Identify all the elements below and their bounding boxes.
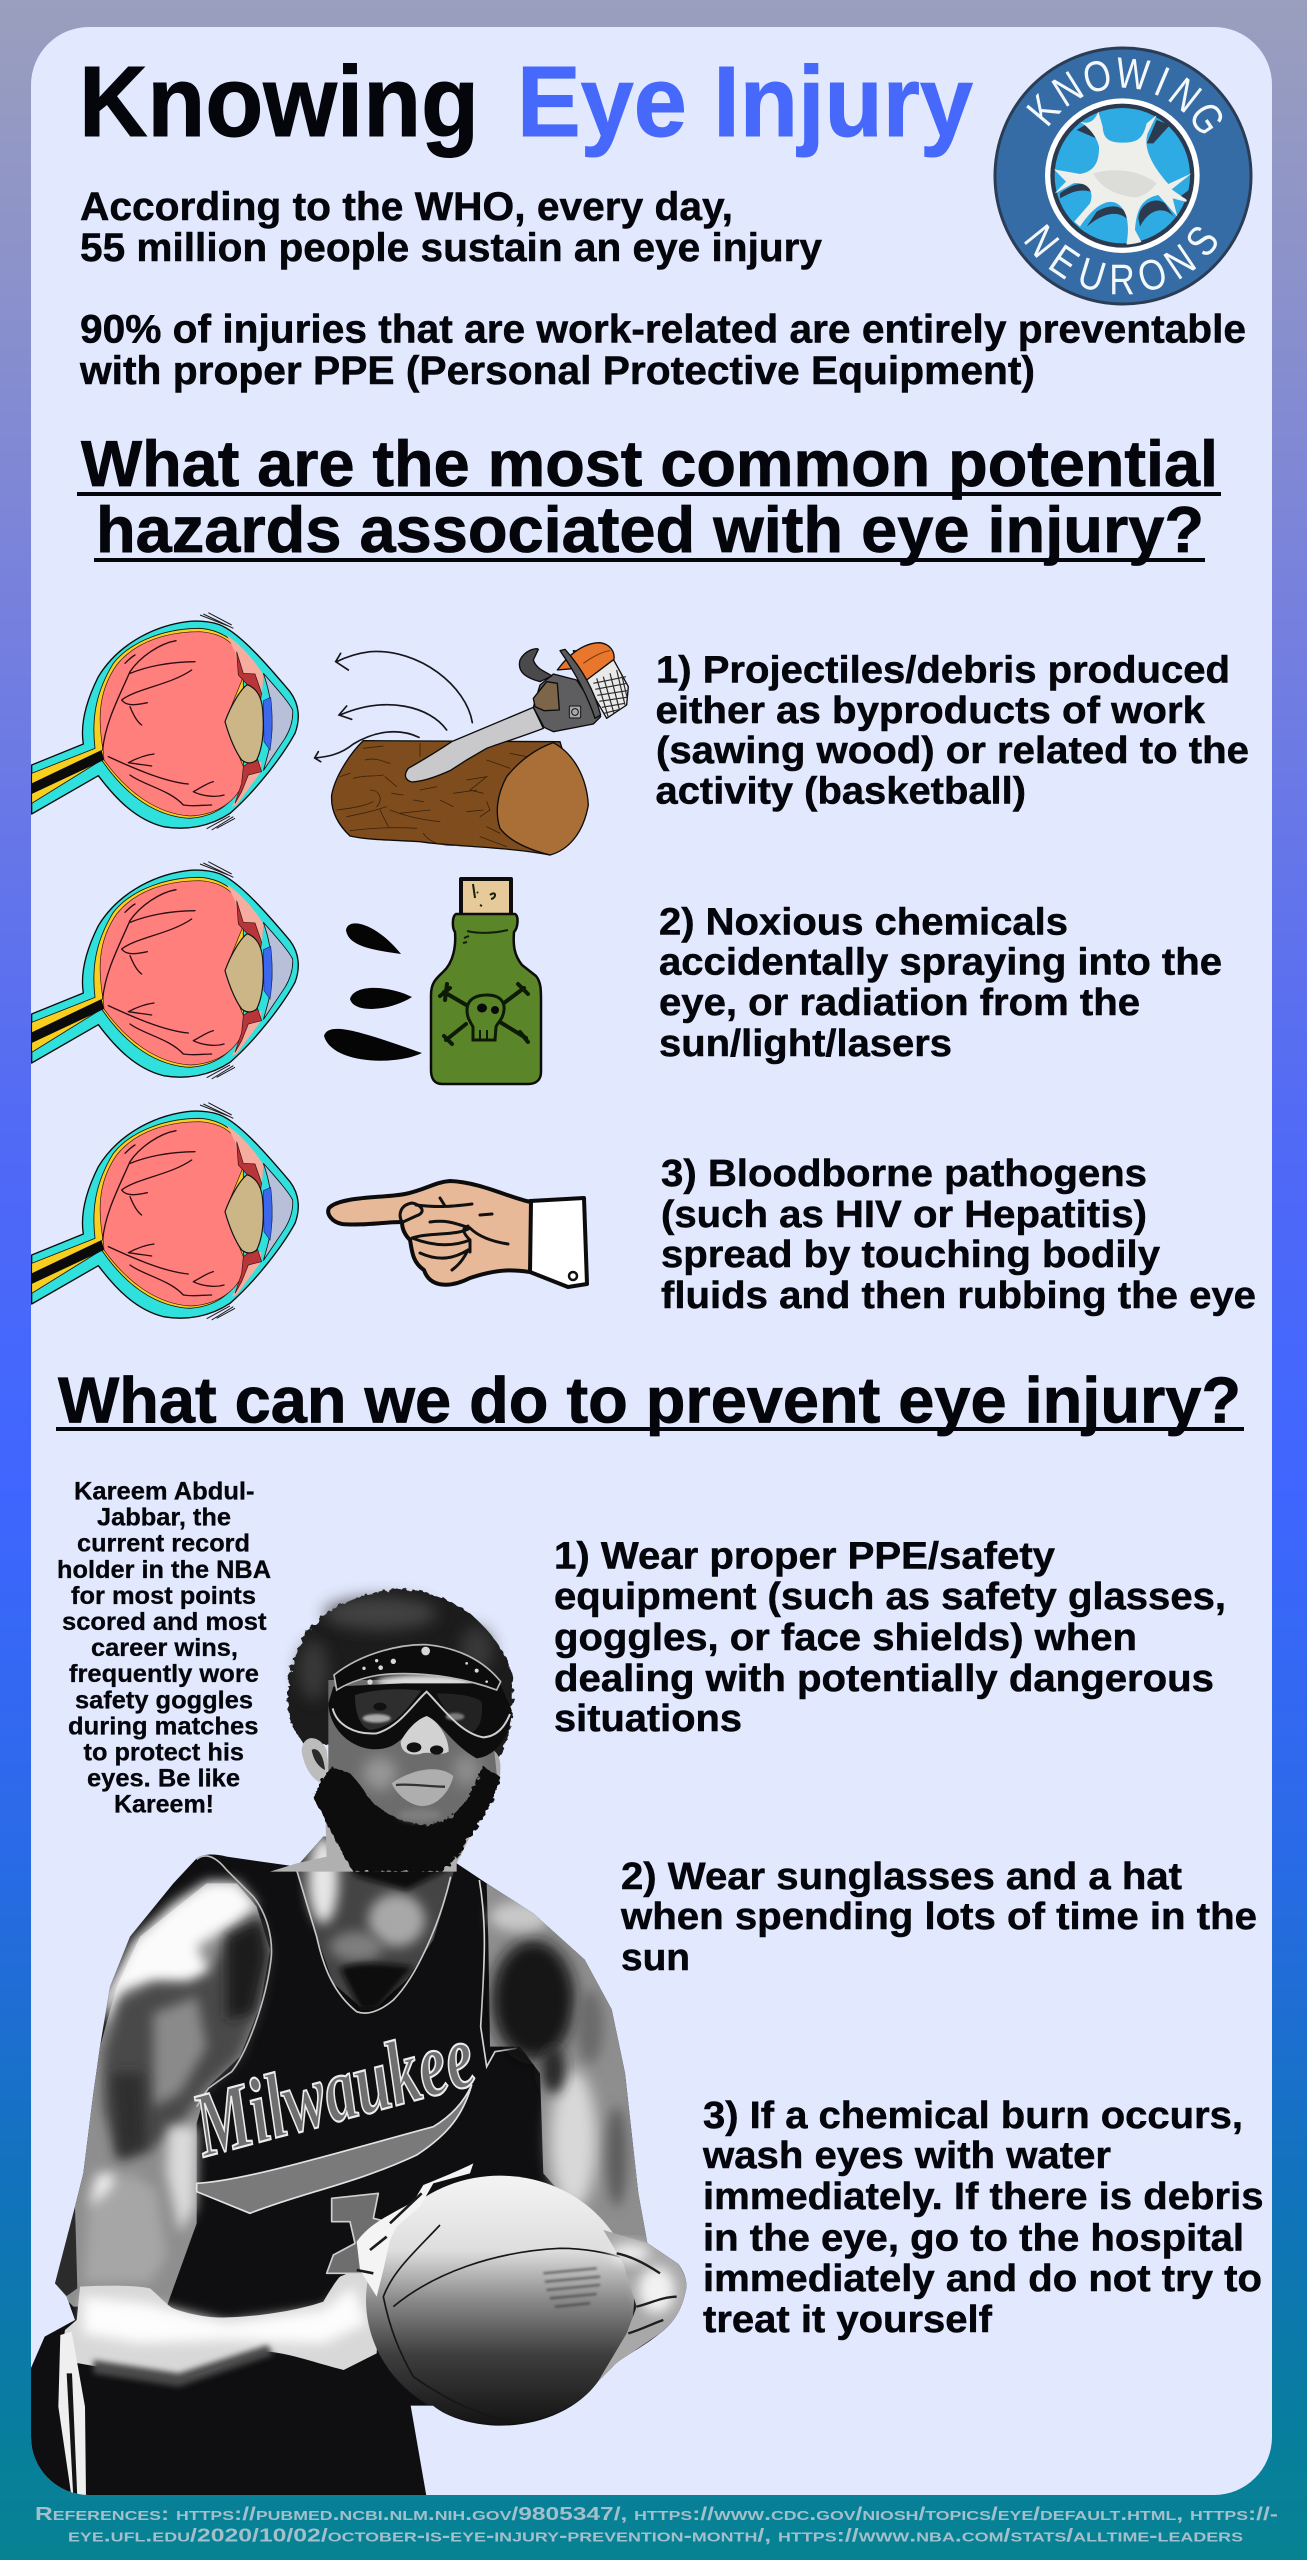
- caption: Kareem Abdul-Jabbar: eyes. Be like: [87, 1765, 240, 1793]
- logo: Knowing Neurons: W: [1114, 49, 1152, 100]
- prevention 1 text: goggles, or face shields) when: [554, 1617, 1137, 1659]
- photo: Kareem Abdul-Jabbar with basketball: [27, 1589, 687, 2498]
- hazard 1 text: activity (basketball): [656, 771, 1026, 813]
- logo: Knowing Neurons: N: [1015, 216, 1068, 266]
- prevention 3 text: [702, 2095, 1264, 2341]
- intro statistic: WHO: [80, 185, 823, 270]
- hazard 1 text: 1) Projectiles/debris produced: [656, 650, 1230, 692]
- caption: Kareem Abdul-Jabbar: scored and most: [62, 1608, 267, 1636]
- prevention 3 text: immediately and do not try to: [703, 2258, 1262, 2300]
- intro statistic: PPE: with proper PPE (Personal Protective Equipment): [79, 349, 1035, 393]
- heading: hazards: hazards associated with eye injury?: [96, 493, 1204, 566]
- icon: pointing hand: [328, 1181, 587, 1287]
- logo: Knowing Neurons: [995, 48, 1251, 304]
- prevention 3 text: wash eyes with water: [702, 2135, 1111, 2177]
- references: [35, 2504, 1278, 2546]
- caption: Kareem Abdul-Jabbar: during matches: [68, 1712, 258, 1740]
- logo: Knowing Neurons: N: [1160, 69, 1210, 122]
- intro statistic: WHO: According to the WHO, every day,: [80, 185, 733, 229]
- caption: Kareem Abdul-Jabbar: to protect his: [84, 1738, 244, 1766]
- intro statistic: PPE: 90% of injuries that are work-related are entirely preventable: [80, 308, 1246, 352]
- prevention 3 text: in the eye, go to the hospital: [703, 2218, 1244, 2260]
- arrows: flying debris: [315, 651, 472, 762]
- heading: prevention: What can we do to prevent eye injury?: [58, 1364, 1241, 1437]
- prevention 2 text: when spending lots of time in the: [620, 1896, 1257, 1938]
- prevention 2 text: [620, 1856, 1257, 1979]
- prevention 3 text: 3) If a chemical burn occurs,: [703, 2095, 1243, 2137]
- references: eye.ufl.edu/2020/10/02/october-is-eye-injury-prevention-month/, https://www.nba.com/stats/alltime-leaders: [68, 2526, 1243, 2546]
- logo: Knowing Neurons: O: [1078, 50, 1116, 103]
- prevention 3 text: immediately. If there is debris: [703, 2176, 1264, 2218]
- hazard 2 text: eye, or radiation from the: [659, 982, 1140, 1024]
- eye diagram 1: [32, 613, 298, 830]
- eye diagram 3: [32, 1103, 298, 1320]
- title: Eye Injury: [517, 46, 973, 158]
- hazard 2 text: sun/light/lasers: [659, 1023, 952, 1065]
- caption: Kareem Abdul-Jabbar: Kareem!: [114, 1791, 214, 1819]
- icon: chemical splashes: [324, 923, 422, 1061]
- icon: chainsaw cutting log: [332, 643, 628, 855]
- hazard 2 text: accidentally spraying into the: [659, 942, 1222, 984]
- caption: Kareem Abdul-Jabbar: holder in the NBA: [57, 1556, 271, 1584]
- caption: Kareem Abdul-Jabbar: frequently wore: [69, 1660, 259, 1688]
- prevention 1 text: dealing with potentially dangerous: [554, 1658, 1214, 1700]
- icon: poison bottle: [431, 879, 541, 1084]
- hazard 1 text: either as byproducts of work: [656, 690, 1206, 732]
- hazard 1 text: [656, 650, 1249, 813]
- hazard 3 text: (such as HIV or Hepatitis): [661, 1194, 1147, 1236]
- caption: Kareem Abdul-Jabbar: career wins,: [91, 1634, 238, 1662]
- logo: Knowing Neurons: S: [1177, 217, 1229, 266]
- prevention 1 text: situations: [554, 1698, 742, 1740]
- intro statistic: WHO: 55 million people sustain an eye injury: [80, 226, 823, 270]
- caption: Kareem Abdul-Jabbar: for most points: [71, 1582, 256, 1610]
- hazard 3 text: spread by touching bodily: [661, 1234, 1160, 1276]
- caption: Kareem Abdul-Jabbar: [57, 1478, 271, 1819]
- caption: Kareem Abdul-Jabbar: current record: [77, 1530, 250, 1558]
- logo: Knowing Neurons: R: [1109, 256, 1135, 304]
- prevention 2 text: 2) Wear sunglasses and a hat: [621, 1856, 1182, 1898]
- hazard 1 text: (sawing wood) or related to the: [656, 730, 1249, 772]
- heading: hazards: What are the most common potential: [81, 427, 1218, 500]
- head with goggles: [270, 1589, 513, 1872]
- jersey script: Milwaukee: [181, 2004, 484, 2177]
- title: [79, 46, 973, 158]
- logo: Knowing Neurons: O: [1132, 248, 1172, 302]
- hazard 2 text: [659, 902, 1222, 1065]
- prevention 1 text: equipment (such as safety glasses,: [554, 1576, 1226, 1618]
- eye diagram 2: [32, 862, 298, 1079]
- prevention 3 text: treat it yourself: [703, 2299, 992, 2341]
- heading: hazards: [77, 427, 1221, 566]
- prevention 1 text: 1) Wear proper PPE/safety: [554, 1536, 1055, 1578]
- caption: Kareem Abdul-Jabbar: safety goggles: [75, 1686, 253, 1714]
- logo: Knowing Neurons: K: [1018, 86, 1070, 135]
- logo: Knowing Neurons: G: [1179, 94, 1234, 144]
- prevention 2 text: sun: [621, 1937, 690, 1979]
- hazard 3 text: [661, 1153, 1256, 1317]
- references: References: https://pubmed.ncbi.nlm.nih.gov/9805347/, https://www.cdc.gov/niosh/topics/eye/default.html, https://-: [35, 2504, 1278, 2524]
- logo: Knowing Neurons: U: [1072, 249, 1111, 302]
- caption: Kareem Abdul-Jabbar: Kareem Abdul-: [74, 1478, 254, 1506]
- hazard 2 text: 2) Noxious chemicals: [659, 902, 1068, 944]
- logo: Knowing Neurons: N: [1044, 62, 1091, 116]
- prevention 1 text: [554, 1536, 1226, 1740]
- hazard 3 text: 3) Bloodborne pathogens: [661, 1153, 1147, 1195]
- logo: Knowing Neurons: I: [1148, 58, 1176, 106]
- title: Knowing: [79, 46, 479, 158]
- caption: Kareem Abdul-Jabbar: Jabbar, the: [97, 1504, 231, 1532]
- hazard 3 text: fluids and then rubbing the eye: [661, 1275, 1256, 1317]
- logo: Knowing Neurons: N: [1156, 235, 1204, 289]
- logo: Knowing Neurons: E: [1041, 236, 1087, 289]
- intro statistic: PPE: [79, 308, 1246, 393]
